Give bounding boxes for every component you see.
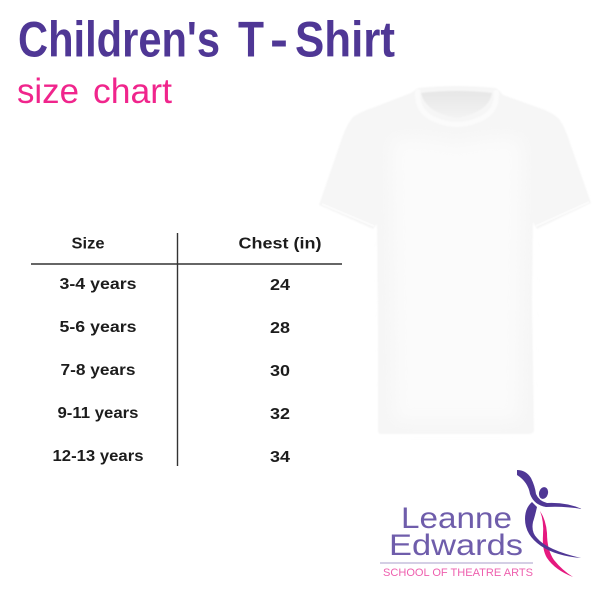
right sleeve hem xyxy=(536,202,589,226)
dancer ribbon xyxy=(540,511,573,577)
dancer arm xyxy=(517,470,582,509)
logo: Leanne Edwards xyxy=(380,470,582,579)
row 5 xyxy=(52,448,290,466)
column header: size: Size xyxy=(72,236,105,252)
row 3 xyxy=(60,362,290,380)
collar rib xyxy=(418,89,496,124)
row 5: 34 xyxy=(270,449,290,466)
shirt body highlight xyxy=(392,138,522,420)
size table xyxy=(31,233,342,466)
title: T xyxy=(238,12,264,68)
subtitle: size xyxy=(17,72,79,111)
row 2: 28 xyxy=(270,320,290,337)
logo dancer icon xyxy=(517,470,582,577)
row 4 xyxy=(58,405,290,423)
row 3: 30 xyxy=(270,363,290,380)
logo tagline: SCHOOL OF THEATRE ARTS xyxy=(383,567,533,579)
table lines xyxy=(31,233,342,466)
row 5: 12-13 years xyxy=(52,448,144,465)
collar inner xyxy=(421,91,492,118)
t-shirt illustration xyxy=(319,86,591,434)
row 1 xyxy=(60,276,290,294)
title: Shirt xyxy=(295,12,395,68)
row 3: 7-8 years xyxy=(60,362,136,379)
row 1: 24 xyxy=(270,277,290,294)
dancer head xyxy=(538,486,549,500)
dancer body xyxy=(525,502,581,558)
row 2 xyxy=(60,319,290,337)
row 4: 9-11 years xyxy=(58,405,138,422)
title: - xyxy=(270,12,288,68)
logo divider xyxy=(380,562,533,564)
left sleeve hem xyxy=(322,204,374,226)
logo wordmark: Edwards xyxy=(389,529,523,562)
logo wordmark: Leanne xyxy=(401,502,512,535)
row 4: 32 xyxy=(270,406,290,423)
row 2: 5-6 years xyxy=(60,319,136,336)
column header: chest: Chest (in) xyxy=(238,236,322,252)
title: Children's xyxy=(18,12,220,68)
row 1: 3-4 years xyxy=(60,276,136,293)
subtitle: chart xyxy=(93,72,172,111)
